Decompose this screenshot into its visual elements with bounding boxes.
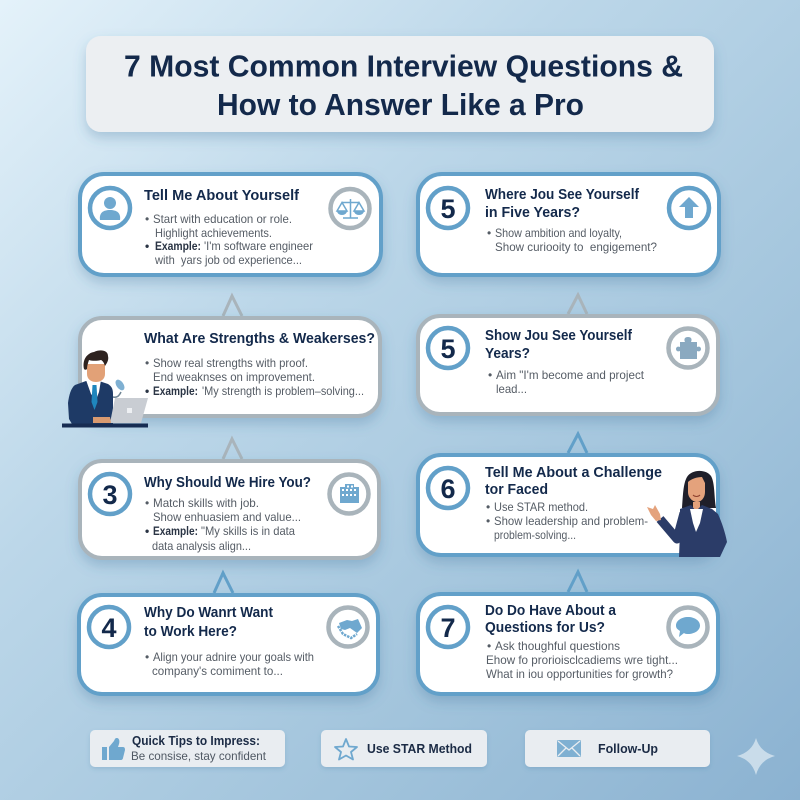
body text: Example: (153, 524, 198, 538)
panel: tell me about yourself (80, 174, 381, 275)
number badge 5: 5 (440, 194, 456, 224)
number badge 4 (89, 607, 129, 647)
body text: Show curiooity to engigement? (495, 240, 657, 254)
body text: • (145, 524, 149, 538)
body text: data analysis align... (152, 539, 251, 553)
panel: questions for us (418, 594, 718, 694)
body text: Show real strengths with proof. (153, 356, 308, 370)
body text (487, 226, 657, 254)
icon: man at laptop (62, 350, 148, 428)
heading: Years? (485, 345, 530, 362)
number badge 5 (428, 188, 468, 228)
icon: office building (330, 474, 368, 514)
heading: Tell Me About Yourself (144, 187, 300, 204)
heading: Do Do Have About a (485, 602, 617, 619)
heading (144, 604, 273, 640)
body text: Start with education or role. (153, 212, 292, 226)
icon: thumbs up (102, 738, 125, 760)
panel: why should we hire you (80, 461, 379, 558)
title panel (86, 36, 714, 132)
body text: • (488, 368, 492, 382)
body text: Use STAR method. (494, 500, 588, 514)
panel: why work here (79, 595, 378, 694)
heading: Why Should We Hire You? (144, 474, 311, 491)
body text: • (145, 384, 149, 398)
tip text: Follow-Up (598, 741, 658, 756)
body text: Match skills with job. (153, 496, 259, 510)
body text: lead... (496, 382, 527, 396)
number badge 7: 7 (440, 613, 456, 643)
heading (485, 602, 617, 636)
body text: • (145, 496, 149, 510)
body text (145, 212, 313, 267)
body text: 'My strength is problem–solving... (202, 384, 364, 398)
icon: speech bubble (668, 608, 708, 646)
body text (488, 368, 645, 396)
heading: Where Jou See Yourself (485, 186, 640, 203)
tip: star method (321, 730, 487, 767)
body text (486, 500, 648, 542)
panel: where you see yourself (418, 174, 719, 275)
heading: in Five Years? (485, 204, 580, 221)
icon: handshake (328, 608, 368, 646)
body text: • (145, 239, 149, 253)
body text: Align your adnire your goals with (153, 650, 314, 664)
arrow: card 6 to card 5 (568, 295, 587, 314)
panel: strengths and weaknesses (62, 318, 380, 428)
title (124, 48, 683, 122)
body text: What in iou opportunities for growth? (486, 667, 673, 681)
number badge 5 (428, 328, 468, 368)
number badge 7 (428, 607, 468, 647)
tip text (131, 733, 267, 763)
icon: star (335, 739, 357, 760)
body text (145, 650, 314, 678)
body text: Example: (155, 239, 201, 253)
icon: scales (330, 189, 370, 228)
icon: envelope (557, 740, 581, 757)
heading: Questions for Us? (485, 619, 605, 636)
number badge 6 (428, 468, 468, 508)
tip text: Be consise, stay confident (131, 749, 267, 763)
heading: tor Faced (485, 481, 548, 498)
body text: • (486, 514, 490, 528)
number badge 4: 4 (101, 613, 117, 643)
icon: woman presenting (647, 471, 727, 557)
body text: • (145, 212, 149, 226)
arrow: card 7 to card 6 (568, 434, 587, 453)
body text: • (145, 356, 149, 370)
heading (485, 327, 633, 362)
tip: follow-up (525, 730, 710, 767)
icon: sparkle (737, 738, 775, 775)
body text: • (145, 650, 149, 664)
icon: person (90, 188, 130, 228)
body text (145, 356, 364, 398)
arrow: card 8 to card 7 (568, 572, 587, 592)
body text: problem-solving... (494, 528, 576, 542)
body text: Highlight achievements. (155, 226, 272, 240)
arrow: card 2 to card 1 (223, 296, 242, 316)
body text (145, 496, 301, 553)
heading (485, 186, 640, 221)
number badge 3 (90, 474, 130, 514)
title: 7 Most Common Interview Questions & (124, 48, 683, 84)
heading: to Work Here? (144, 623, 237, 640)
heading (485, 464, 662, 498)
icon: up arrow (669, 188, 709, 228)
heading: Tell Me About a Challenge (485, 464, 662, 481)
panel: tell me about a challenge (418, 455, 727, 557)
tip: quick tips (90, 730, 285, 767)
body text (486, 639, 678, 681)
icon: puzzle piece (668, 328, 708, 368)
body text: Show enhuasiem and value... (153, 510, 301, 524)
number badge 5: 5 (440, 334, 456, 364)
body text: with yars job od experience... (154, 253, 302, 267)
title: How to Answer Like a Pro (217, 87, 584, 122)
heading: Show Jou See Yourself (485, 327, 633, 344)
body text: Show leadership and problem- (494, 514, 648, 528)
heading: Why Do Wanrt Want (144, 604, 273, 621)
body text: Example: (153, 384, 198, 398)
tip text: Quick Tips to Impress: (132, 733, 260, 748)
number badge 6: 6 (440, 474, 456, 504)
panel: show you see yourself (418, 316, 718, 414)
body text: company's comiment to... (152, 664, 283, 678)
body text: Show ambition and loyalty, (495, 226, 622, 240)
arrow: card 3 to card 2 (223, 439, 242, 459)
body text: 'I'm software engineer (204, 239, 313, 253)
tip text: Use STAR Method (367, 741, 472, 756)
body text: • (487, 226, 491, 240)
body text: Aim "I'm become and project (496, 368, 645, 382)
body text: Ehow fo prorioisclcadiems wre tight... (486, 653, 678, 667)
arrow: card 4 to card 3 (214, 573, 233, 593)
heading: What Are Strengths & Weakerses? (144, 330, 375, 347)
body text: "My skills is in data (201, 524, 295, 538)
body text: • (486, 500, 490, 514)
body text: • (487, 639, 491, 653)
body text: Ask thoughful questions (495, 639, 620, 653)
body text: End weaknses on improvement. (153, 370, 315, 384)
number badge 3: 3 (102, 480, 118, 510)
